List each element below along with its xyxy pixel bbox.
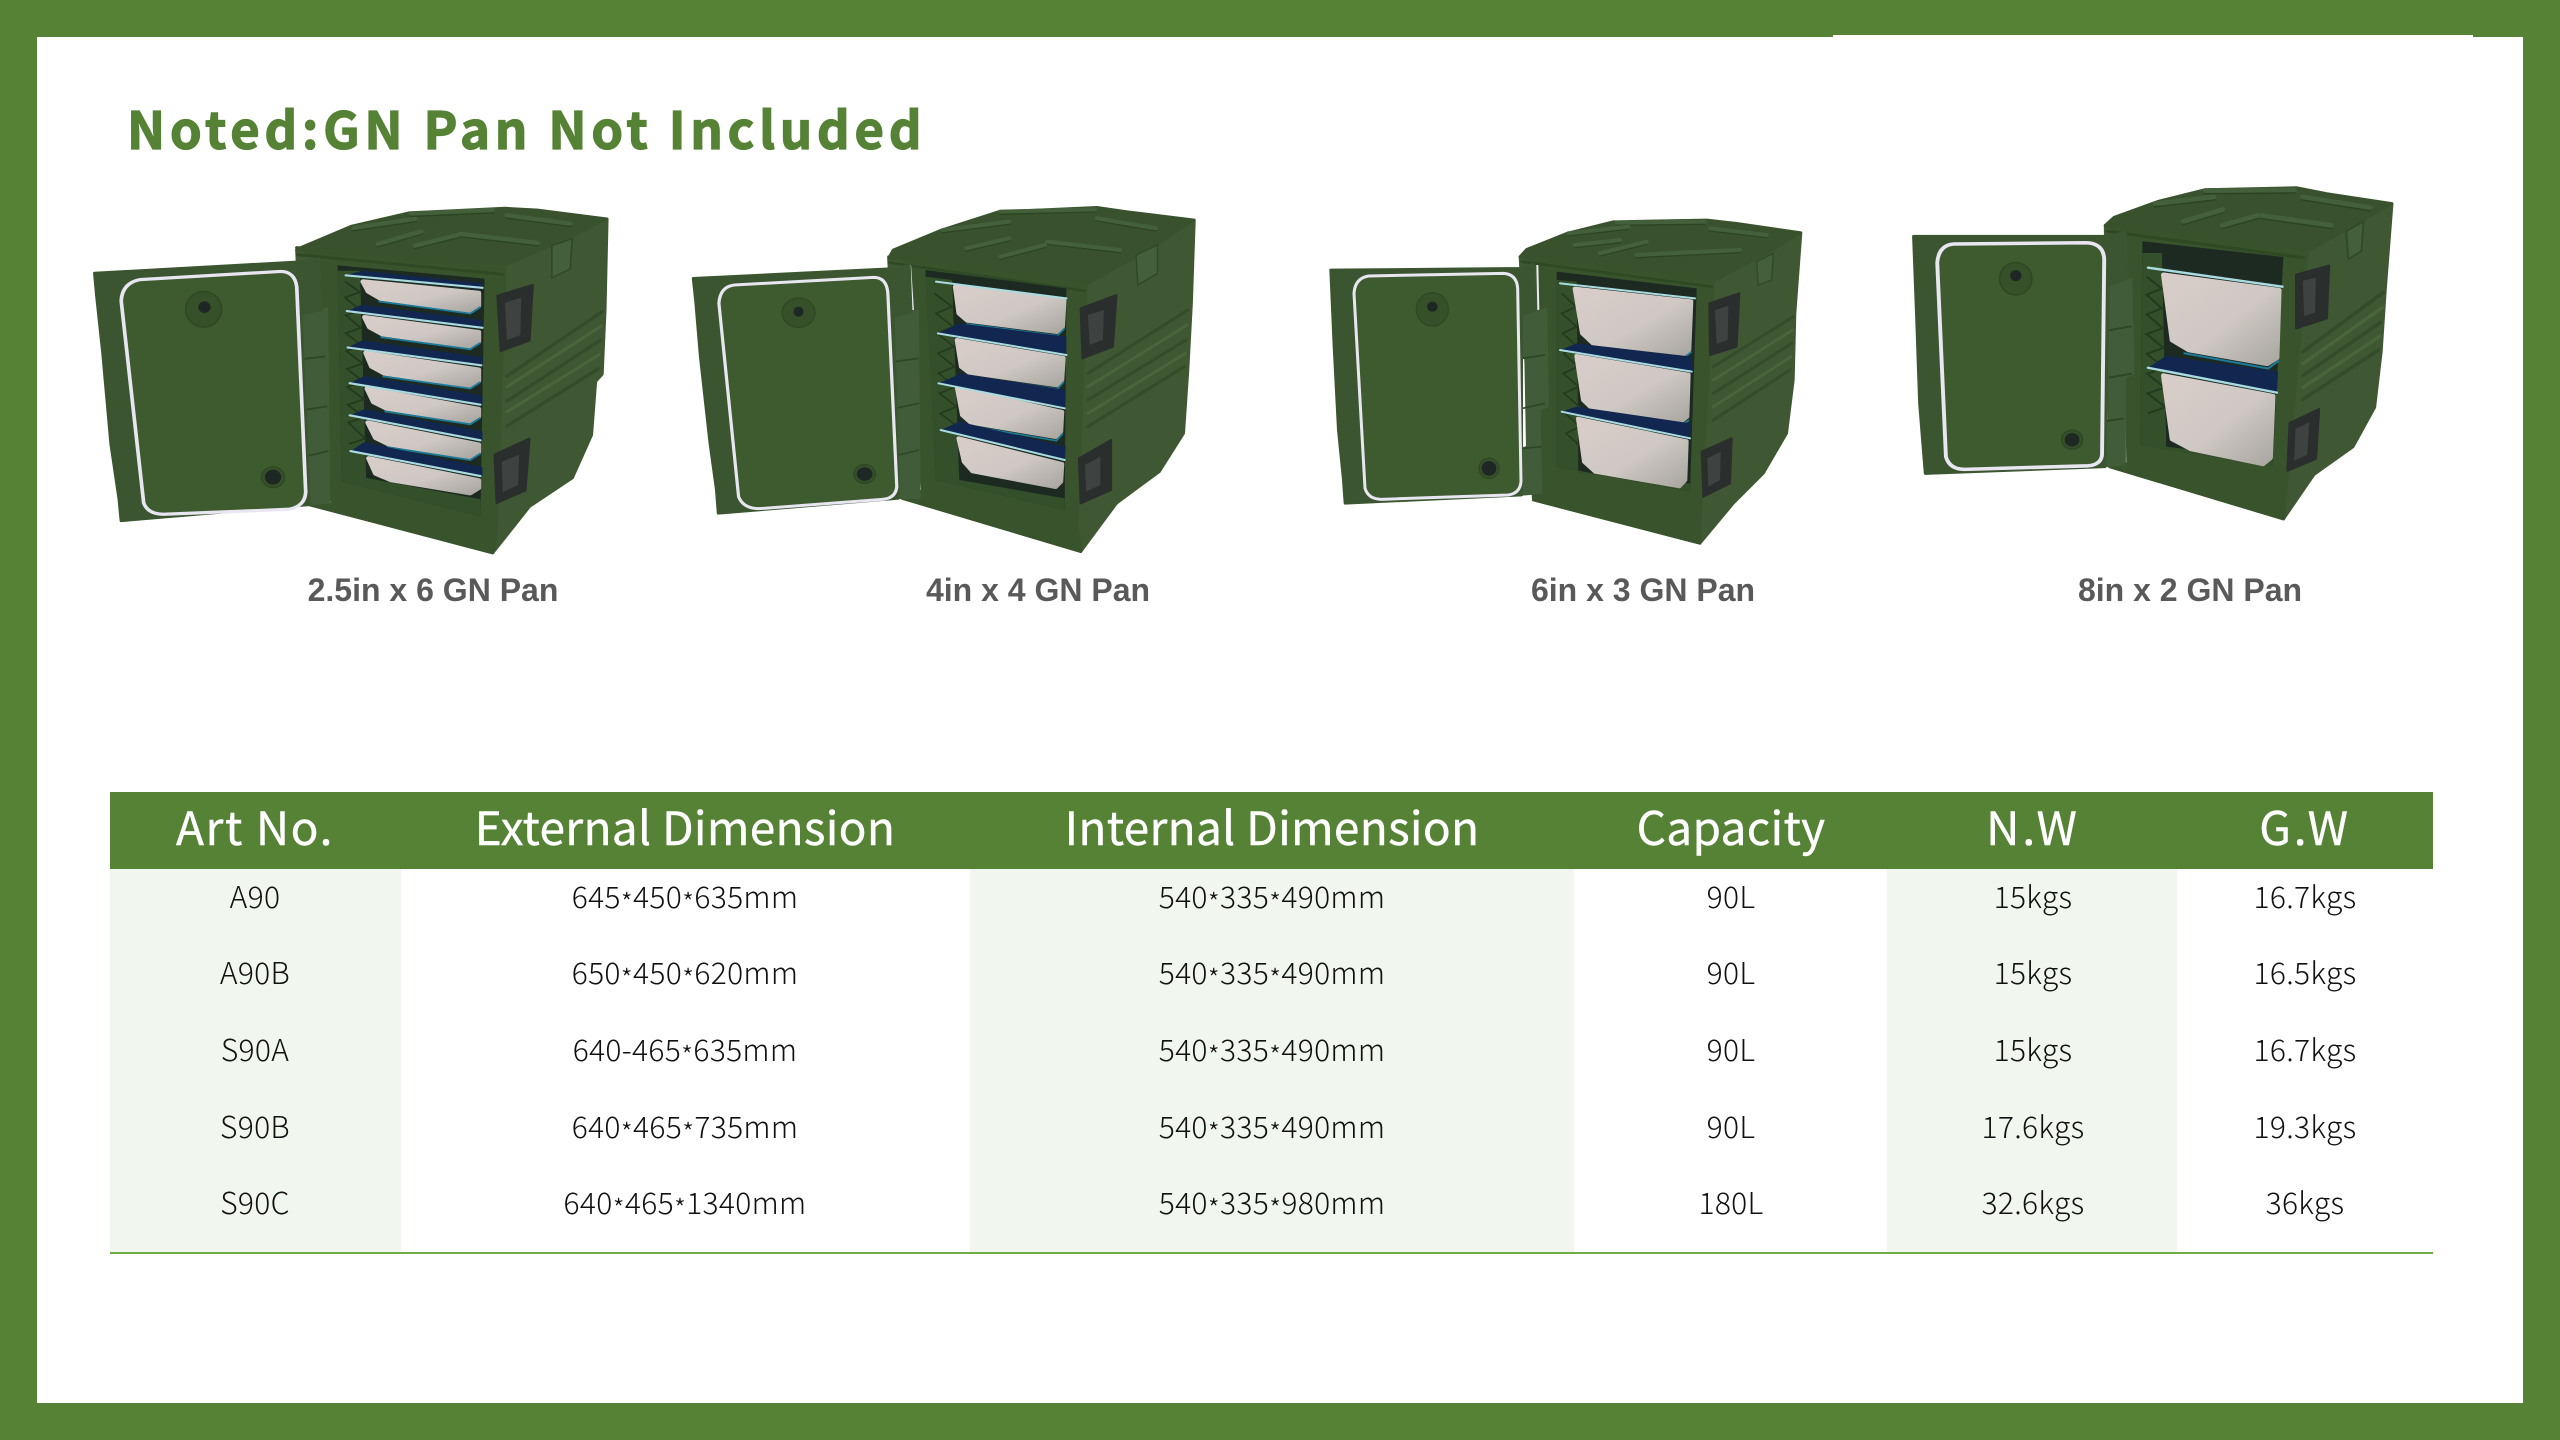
cart body <box>1520 220 1801 543</box>
pans <box>2148 268 2282 464</box>
row A90B: 90L <box>1707 949 1755 993</box>
row A90: 645*450*635mm <box>572 873 798 921</box>
row A90: 90L <box>1707 873 1755 917</box>
door <box>95 258 329 521</box>
row A90B: 540*335*490mm <box>1159 949 1385 997</box>
row S90A: 540*335*490mm <box>1159 1026 1385 1074</box>
row A90B: 650*450*620mm <box>572 949 798 997</box>
row A90B: A90B <box>220 949 290 993</box>
row S90A <box>221 1026 2356 1074</box>
cart body <box>2106 188 2392 519</box>
row S90B: 90L <box>1707 1103 1755 1147</box>
header row: G.W <box>2259 793 2351 859</box>
row S90C: S90C <box>220 1179 290 1223</box>
white strip on top edge <box>1833 35 2473 37</box>
latches <box>495 285 533 503</box>
shaded column: Art No. <box>110 869 401 1253</box>
title: Noted:GN Pan Not Included <box>127 90 926 164</box>
caption: 4in x 4 GN Pan <box>926 572 1150 608</box>
pans <box>346 271 482 493</box>
specification table <box>110 792 2433 1254</box>
row S90A: 15kgs <box>1994 1026 2072 1070</box>
row S90C: 540*335*980mm <box>1159 1179 1385 1227</box>
row A90: A90 <box>230 873 280 917</box>
row S90C: 36kgs <box>2266 1179 2344 1223</box>
pans <box>1560 283 1695 486</box>
row A90 <box>230 873 2356 921</box>
latches <box>1702 293 1739 497</box>
door <box>1914 232 2134 473</box>
row A90: 15kgs <box>1994 873 2072 917</box>
header row: N.W <box>1986 793 2080 859</box>
row S90A: S90A <box>221 1026 289 1070</box>
header row: External Dimension <box>475 793 895 859</box>
door <box>693 265 920 513</box>
product: 8in x 2 GN Pan <box>1912 186 2394 608</box>
latches <box>1079 295 1116 503</box>
row A90: 540*335*490mm <box>1159 873 1385 921</box>
header row: Capacity <box>1637 793 1825 859</box>
shaded column: N.W <box>1887 869 2177 1253</box>
shaded column: Internal Dimension <box>970 869 1574 1253</box>
row S90C: 640*465*1340mm <box>564 1179 806 1227</box>
header row: Internal Dimension <box>1065 793 1479 859</box>
product: 6in x 3 GN Pan <box>1329 218 1802 608</box>
cart body <box>297 208 607 553</box>
row S90B: 19.3kgs <box>2254 1103 2356 1147</box>
row S90B: S90B <box>220 1103 290 1147</box>
row S90A: 640-465*635mm <box>573 1026 797 1074</box>
bottom rule <box>110 1252 2433 1254</box>
row S90C: 32.6kgs <box>1982 1179 2084 1223</box>
product: 4in x 4 GN Pan <box>692 206 1196 608</box>
row A90B: 16.5kgs <box>2254 949 2356 993</box>
caption: 8in x 2 GN Pan <box>2078 572 2302 608</box>
row S90A: 16.7kgs <box>2254 1026 2356 1070</box>
row S90B <box>220 1103 2356 1151</box>
pans <box>936 282 1066 487</box>
row S90C: 180L <box>1698 1179 1764 1223</box>
row S90B: 540*335*490mm <box>1159 1103 1385 1151</box>
row S90A: 90L <box>1707 1026 1755 1070</box>
header row: Art No. <box>176 793 334 859</box>
row A90B: 15kgs <box>1994 949 2072 993</box>
cart body <box>889 207 1194 552</box>
caption: 2.5in x 6 GN Pan <box>308 572 558 608</box>
row A90: 16.7kgs <box>2254 873 2356 917</box>
product: 2.5in x 6 GN Pan <box>93 206 609 608</box>
caption: 6in x 3 GN Pan <box>1531 572 1755 608</box>
row S90B: 17.6kgs <box>1982 1103 2084 1147</box>
latches <box>2288 266 2329 471</box>
header row <box>110 792 2433 869</box>
door <box>1331 264 1548 503</box>
row A90B <box>220 949 2356 997</box>
row S90B: 640*465*735mm <box>572 1103 798 1151</box>
row S90C <box>220 1179 2344 1227</box>
